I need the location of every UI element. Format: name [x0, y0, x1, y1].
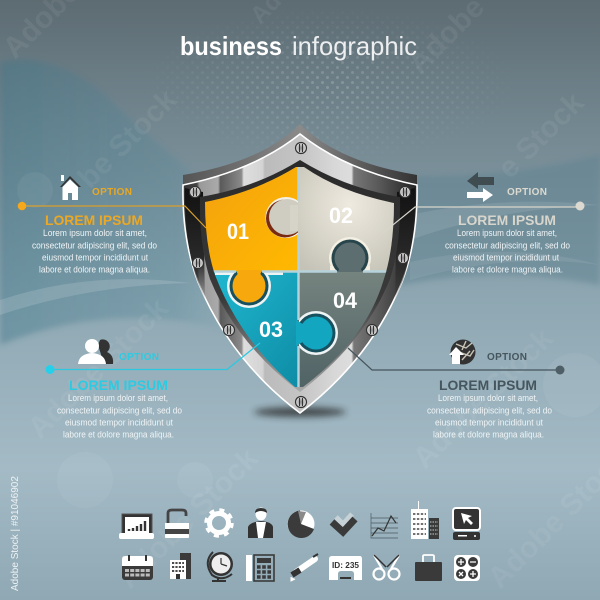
body 03 — [57, 393, 182, 440]
icon: scissors — [374, 555, 400, 580]
body 01: labore et dolore magna aliqua. — [39, 264, 150, 274]
bolts — [190, 142, 410, 408]
icon: building — [170, 553, 191, 579]
watermark: Adobe Stock — [112, 442, 265, 595]
option label 02: OPTION — [507, 187, 547, 198]
heading 01: LOREM IPSUM — [45, 212, 143, 228]
watermark: be Stock — [72, 83, 184, 195]
icon: businessman — [248, 508, 273, 538]
callout 04 — [348, 340, 564, 440]
option label 01: OPTION — [92, 187, 132, 198]
body 04: eiusmod tempor incididunt ut — [435, 418, 543, 428]
option label 04: OPTION — [487, 352, 527, 363]
icon: id card: ID: 235 — [332, 561, 360, 570]
body 01: consectetur adipiscing elit, sed do — [32, 240, 157, 250]
knob of piece 2 into 1 — [266, 197, 298, 238]
icon: people — [78, 339, 113, 364]
icon: laptop chart — [119, 514, 154, 539]
dot 02 — [576, 202, 584, 210]
watermark: Adobe Stock — [407, 322, 560, 475]
icon: calendar — [122, 555, 153, 580]
connector 03 — [50, 343, 260, 370]
knob of piece 3 into 4 — [299, 311, 338, 355]
body 01: eiusmod tempor incididunt ut — [42, 252, 148, 262]
dot 03 — [46, 365, 54, 374]
body 04: labore et dolore magna aliqua. — [433, 430, 544, 440]
shield shadow — [254, 407, 346, 417]
title: business — [180, 31, 282, 61]
icon: briefcase — [415, 555, 442, 581]
body 01 — [32, 228, 157, 274]
icon: computer cursor — [453, 508, 480, 540]
heading 03: LOREM IPSUM — [69, 377, 168, 393]
option label 03: OPTION — [119, 352, 159, 363]
dark side bands — [185, 188, 205, 300]
icon row 1 — [119, 501, 480, 540]
icon: pie chart — [288, 510, 314, 538]
body 02: consectetur adipiscing elit, sed do — [445, 240, 570, 250]
knob of piece 4 into 2 — [329, 237, 371, 272]
body 02: Lorem ipsum dolor sit amet, — [457, 228, 557, 238]
callout 03 — [46, 339, 260, 440]
icon: arrows — [467, 172, 494, 202]
body 04: Lorem ipsum dolor sit amet, — [438, 393, 538, 403]
watermark: Adobe Stock — [22, 292, 175, 445]
piece seams — [214, 167, 386, 387]
icon: pen — [291, 554, 318, 581]
body 03: eiusmod tempor incididunt ut — [65, 418, 173, 428]
callout 01 — [18, 175, 206, 274]
title: infographic — [292, 31, 417, 61]
body 02 — [445, 228, 570, 274]
metal body — [183, 134, 417, 413]
icon: gear — [206, 510, 232, 536]
dot 01 — [18, 202, 26, 210]
callout 02 — [383, 172, 584, 274]
number 04: 04 — [333, 288, 358, 313]
body 02: eiusmod tempor incididunt ut — [453, 252, 559, 262]
icon: house — [60, 175, 81, 200]
shield — [183, 124, 417, 413]
dark inner bevel — [200, 160, 400, 392]
body 01: Lorem ipsum dolor sit amet, — [43, 228, 147, 238]
icon: line chart — [371, 513, 398, 538]
title — [180, 31, 417, 61]
number 01: 01 — [227, 219, 249, 244]
puzzle — [205, 167, 394, 387]
icon: math keys — [454, 555, 480, 581]
icon: id card — [329, 556, 362, 580]
body 03: Lorem ipsum dolor sit amet, — [68, 393, 168, 403]
number 02: 02 — [329, 203, 353, 228]
heading 04: LOREM IPSUM — [439, 377, 537, 393]
body 02: labore et dolore magna aliqua. — [452, 264, 563, 274]
heading 02: LOREM IPSUM — [458, 212, 556, 228]
knob of piece 1 into 3 — [215, 272, 283, 308]
icon: globe — [449, 340, 476, 364]
body 04: consectetur adipiscing elit, sed do — [427, 406, 552, 416]
icon row 2 — [122, 552, 480, 581]
connector 04 — [348, 348, 560, 370]
icon: check mark — [332, 514, 355, 532]
watermark: e Stock — [492, 86, 591, 185]
connector 01 — [22, 206, 206, 228]
connector 02 — [383, 207, 580, 233]
icon: office towers — [411, 501, 439, 539]
body 03: consectetur adipiscing elit, sed do — [57, 406, 182, 416]
icon: open padlock — [165, 510, 189, 538]
body 04 — [427, 393, 552, 440]
icon: calculator — [246, 555, 274, 581]
body 03: labore et dolore magna aliqua. — [63, 430, 174, 440]
number 03: 03 — [259, 317, 283, 342]
rim — [183, 124, 417, 192]
dot 04 — [556, 366, 564, 374]
image id: Adobe Stock | #91046902 — [10, 476, 21, 591]
icon: globe clock — [208, 552, 233, 581]
